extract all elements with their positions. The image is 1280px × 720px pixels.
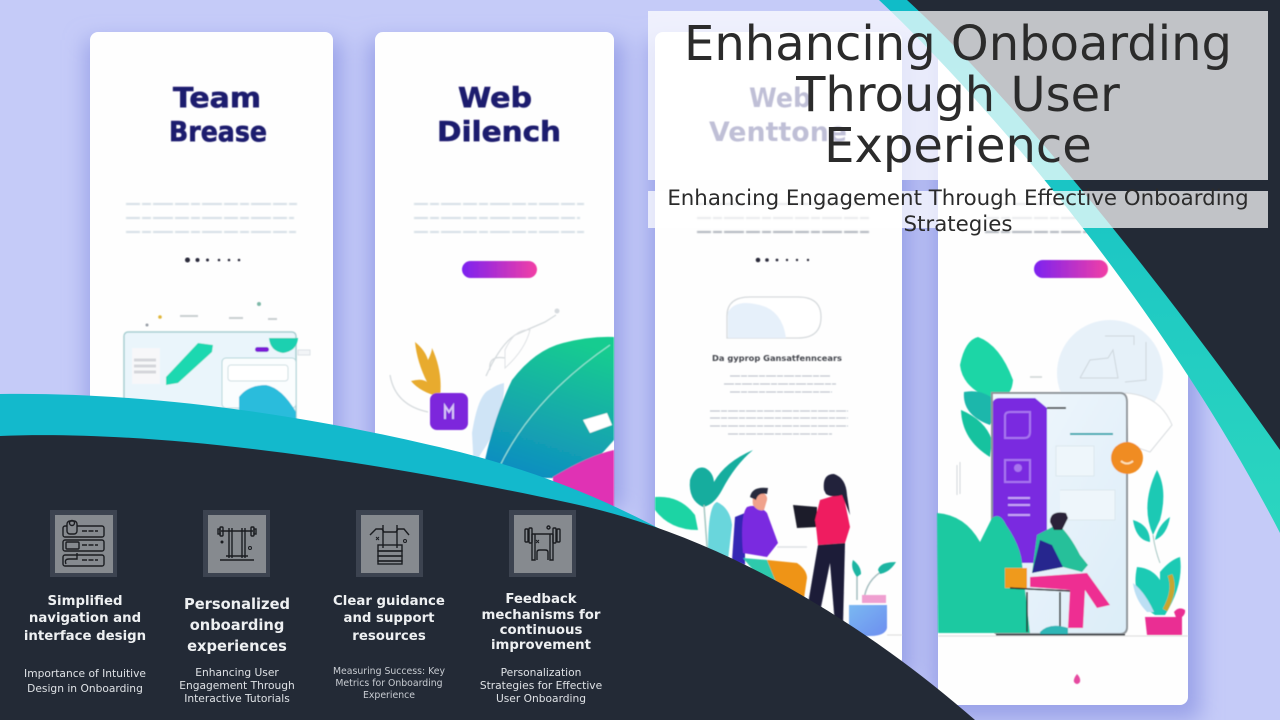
- description: interactive tutorials: [179, 666, 295, 705]
- card caption text: [710, 354, 848, 434]
- pagination dots: [756, 258, 809, 262]
- heading: clear guidance: [333, 594, 445, 644]
- title: [684, 16, 1232, 174]
- description: key metrics: Measuring Success: Key: [333, 666, 446, 677]
- heading: feedback mechanisms: improvement: [491, 638, 592, 653]
- description: interactive tutorials: Interactive Tutorials: [184, 692, 290, 705]
- illustration: two people with plants: [655, 450, 902, 636]
- card heading: Team Brease: Brease: [169, 115, 267, 148]
- screen card: Web Dilench: [375, 32, 614, 512]
- subtitle: Strategies: [904, 212, 1012, 237]
- description: intuitive design: Design in Onboarding: [27, 682, 143, 695]
- card heading: Web Dilench: [437, 81, 561, 148]
- heading: clear guidance: and support: [343, 611, 435, 626]
- description: personalization strategies: User Onboarding: [496, 692, 586, 705]
- icon: checklist panel: [50, 510, 117, 577]
- item: personalized onboarding: [179, 510, 295, 705]
- subtitle: Enhancing Engagement Through Effective Onboarding: [667, 186, 1249, 211]
- icon: barbell rack: [203, 510, 270, 577]
- heading: simplified navigation: [24, 594, 146, 644]
- description: interactive tutorials: Enhancing User: [195, 666, 279, 679]
- screen card: Team Brease: [90, 32, 333, 472]
- description: personalization strategies: Personalization: [501, 666, 581, 679]
- heading: clear guidance: Clear guidance: [333, 594, 445, 609]
- illustration: browser window with teal shapes: [124, 302, 310, 432]
- heading: personalized onboarding: onboarding: [190, 617, 284, 634]
- title: Enhancing Onboarding: [684, 16, 1232, 72]
- card heading: Web Venttone: [709, 83, 847, 148]
- description: key metrics: [333, 666, 446, 701]
- screen card: Web Venttone: [655, 32, 902, 667]
- heading: personalized onboarding: Personalized: [184, 596, 290, 613]
- pagination dots: [185, 258, 240, 262]
- button: [1034, 260, 1108, 278]
- heading: feedback mechanisms: continuous: [500, 623, 583, 638]
- illustration: leaves and purple tile: [390, 308, 614, 510]
- illustration: person seated by phone: [937, 320, 1188, 684]
- description: intuitive design: [24, 667, 146, 695]
- title: Through User: [795, 67, 1120, 123]
- card heading: Web Dilench: Dilench: [437, 115, 561, 148]
- heading: feedback mechanisms: mechanisms for: [481, 608, 601, 623]
- heading: feedback mechanisms: [481, 592, 601, 653]
- title backing panel: [648, 11, 1268, 180]
- button: [462, 261, 537, 278]
- card heading: Web Dilench: Web: [458, 81, 532, 114]
- description: personalization strategies: [480, 666, 602, 705]
- screen card: phone illustration: [937, 20, 1188, 705]
- icon: weight stack: [356, 510, 423, 577]
- card heading: Web Venttone: Web: [749, 83, 811, 114]
- icon: bench press: [509, 510, 576, 577]
- heading: personalized onboarding: [184, 596, 290, 655]
- card heading: Team Brease: [169, 81, 267, 148]
- item: simplified navigation: [24, 510, 146, 695]
- card heading: Web Venttone: Venttone: [709, 117, 847, 148]
- heading: feedback mechanisms: Feedback: [505, 592, 578, 607]
- subtitle: [667, 186, 1249, 237]
- subtitle backing panel: [648, 191, 1268, 228]
- card caption text: Da gyprop Gansatfenncears: [712, 354, 842, 363]
- description: key metrics: Experience: [363, 690, 415, 701]
- heading: simplified navigation: Simplified: [47, 594, 123, 609]
- card heading: Team Brease: Team: [173, 81, 261, 114]
- heading: clear guidance: resources: [352, 629, 426, 644]
- title: Experience: [824, 118, 1092, 174]
- description: personalization strategies: Strategies for Effective: [480, 679, 602, 692]
- speech bubble outline: [727, 297, 821, 338]
- description: interactive tutorials: Engagement Through: [179, 679, 295, 692]
- heading: personalized onboarding: experiences: [187, 638, 287, 655]
- top-right dark corner with teal band: [879, 0, 1280, 533]
- item: clear guidance: [333, 510, 446, 701]
- item: feedback mechanisms: [480, 510, 602, 705]
- description: intuitive design: Importance of Intuitive: [24, 667, 146, 680]
- bottom-left dark wave with teal edge: [0, 394, 975, 720]
- description: key metrics: Metrics for Onboarding: [335, 678, 443, 689]
- heading: simplified navigation: navigation and: [29, 611, 141, 626]
- heading: simplified navigation: interface design: [24, 629, 146, 644]
